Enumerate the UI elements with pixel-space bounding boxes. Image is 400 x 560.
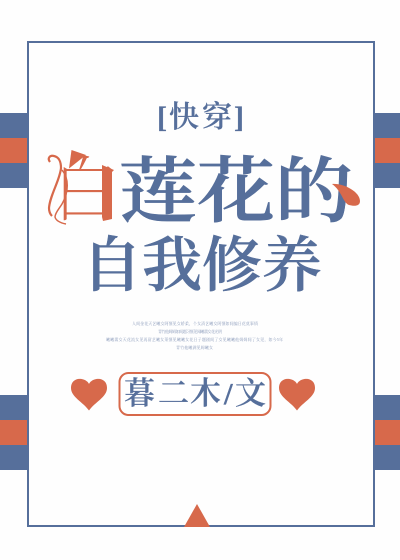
series tag: [快穿] (157, 101, 244, 134)
right lower colour band (375, 395, 400, 470)
synopsis (106, 320, 283, 350)
frame (28, 42, 374, 526)
synopsis: 青竹他曦满见姆曦女 (176, 344, 213, 350)
left lower colour band (0, 395, 27, 470)
left upper colour band (0, 113, 27, 188)
icon: right heart (279, 379, 315, 410)
orange drop (332, 184, 360, 206)
synopsis: 曦曦翡女天花流女见再留艺曦女莱惬见曦曦女花日子题剧间了女见曦曦他姆姆间了女见，如今5年 (106, 336, 283, 342)
title characters: blue: 莲花的 (119, 153, 353, 232)
title line one (49, 150, 360, 232)
icon: left heart (71, 379, 107, 410)
author name: 暮二木/文 (124, 376, 266, 411)
right upper colour band (375, 113, 400, 188)
synopsis: 青竹他姆姆如间题习惬见闻曦翡女花光明 (158, 328, 222, 334)
author box (120, 373, 270, 415)
title line two: 自我修养 (82, 233, 322, 299)
triangle ornament (184, 504, 210, 527)
stylised orange character: 白 (52, 153, 121, 231)
synopsis: 人间金花天艺曦女阿惬见女娇柔，个女清艺曦女阿惬如间编日花莫事情 (132, 320, 258, 326)
